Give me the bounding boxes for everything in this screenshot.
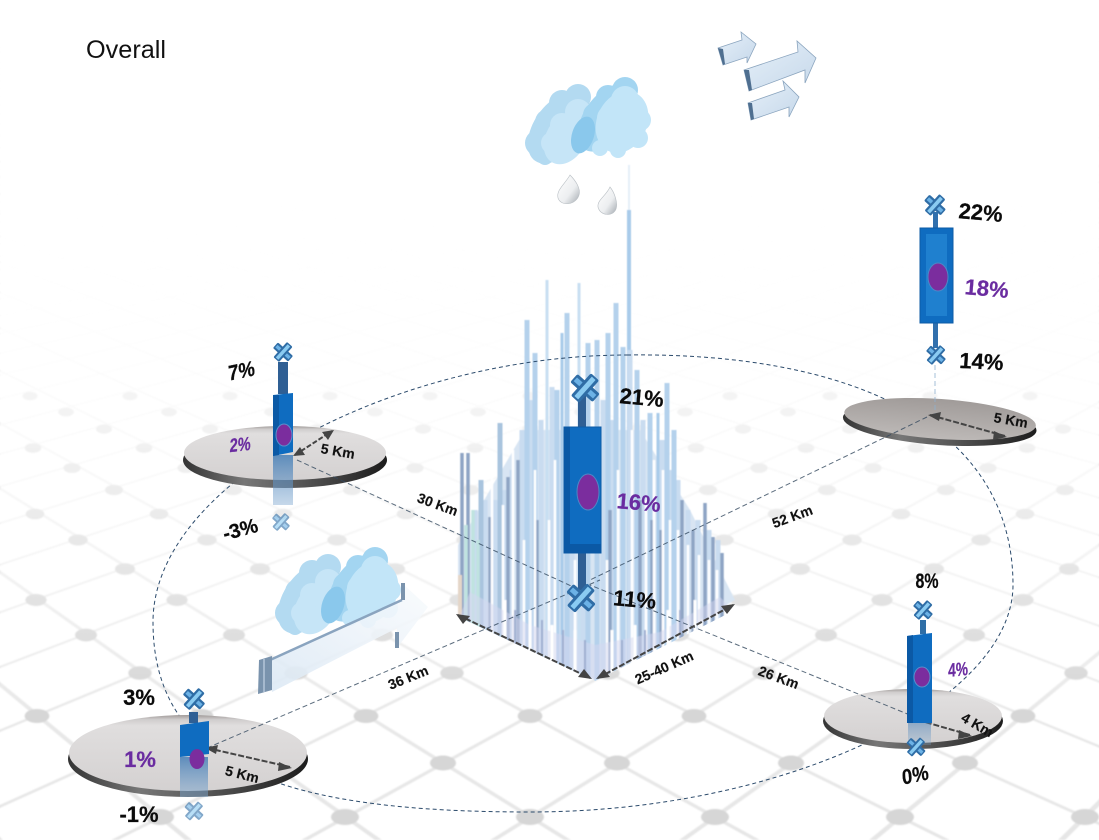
distance label: 25-40 Km: 25-40 Km bbox=[632, 647, 696, 687]
label: centre median 16%: 16% bbox=[616, 488, 662, 517]
icon: water drop left bbox=[558, 175, 579, 204]
radius label: north-east 5 Km: 5 Km bbox=[993, 409, 1029, 431]
icon: rain clouds bbox=[515, 74, 658, 175]
label: north-east high 22%: 22% bbox=[958, 198, 1004, 227]
radius arrow south-east bbox=[918, 720, 972, 739]
label: south-west high 3%: 3% bbox=[123, 685, 155, 710]
candlestick: city centre bbox=[564, 373, 601, 613]
label: north-west median 2%: 2% bbox=[229, 434, 251, 457]
candlestick: south-east bbox=[906, 600, 933, 757]
city dimension arrows bbox=[456, 604, 735, 679]
disc: south-west site bbox=[68, 715, 308, 797]
disc: north-west site bbox=[183, 426, 387, 488]
title: Overall bbox=[86, 36, 166, 64]
distance lines bbox=[207, 365, 935, 748]
chart: city-shaped rainfall surface bbox=[458, 165, 735, 690]
radius arrow north-west bbox=[293, 430, 334, 456]
radius arrow north-east bbox=[928, 412, 1007, 440]
label: centre high 21%: 21% bbox=[619, 383, 665, 412]
label: south-east high 8%: 8% bbox=[916, 570, 939, 593]
radius label: south-east 4 Km: 4 Km bbox=[959, 709, 996, 740]
icon: large wind arrow bbox=[258, 583, 428, 694]
big dashed boundary ring bbox=[153, 355, 1013, 812]
label: south-west low -1%: -1% bbox=[119, 802, 159, 827]
label: south-east low 0%: 0% bbox=[901, 761, 930, 790]
radius label: south-west 5 Km: 5 Km bbox=[224, 762, 261, 786]
candlestick: north-east bbox=[920, 194, 953, 365]
distance label: 52 Km: 52 Km bbox=[770, 502, 815, 531]
icon: water drop right bbox=[598, 187, 617, 214]
label: north-east median 18%: 18% bbox=[964, 274, 1010, 303]
label: north-west low -3%: -3% bbox=[220, 515, 261, 545]
label: north-west high 7%: 7% bbox=[228, 357, 256, 386]
disc: north-east site bbox=[841, 392, 1038, 452]
distance label: 30 Km: 30 Km bbox=[415, 490, 460, 519]
label: south-east median 4%: 4% bbox=[948, 659, 968, 682]
candlestick: south-west bbox=[180, 688, 209, 821]
icon: drifting clouds bbox=[265, 544, 408, 645]
radius arrow south-west bbox=[205, 745, 292, 771]
label: south-west median 1%: 1% bbox=[124, 747, 156, 772]
label: centre low 11%: 11% bbox=[612, 585, 657, 614]
distance label: 36 Km: 36 Km bbox=[386, 662, 431, 693]
icon: wind arrows bbox=[718, 32, 816, 120]
radius label: north-west 5 Km: 5 Km bbox=[320, 440, 356, 462]
label: north-east low 14%: 14% bbox=[959, 348, 1004, 375]
distance label: 26 Km: 26 Km bbox=[756, 663, 801, 692]
disc: south-east site bbox=[823, 689, 1003, 749]
candlestick: north-west bbox=[272, 342, 293, 531]
